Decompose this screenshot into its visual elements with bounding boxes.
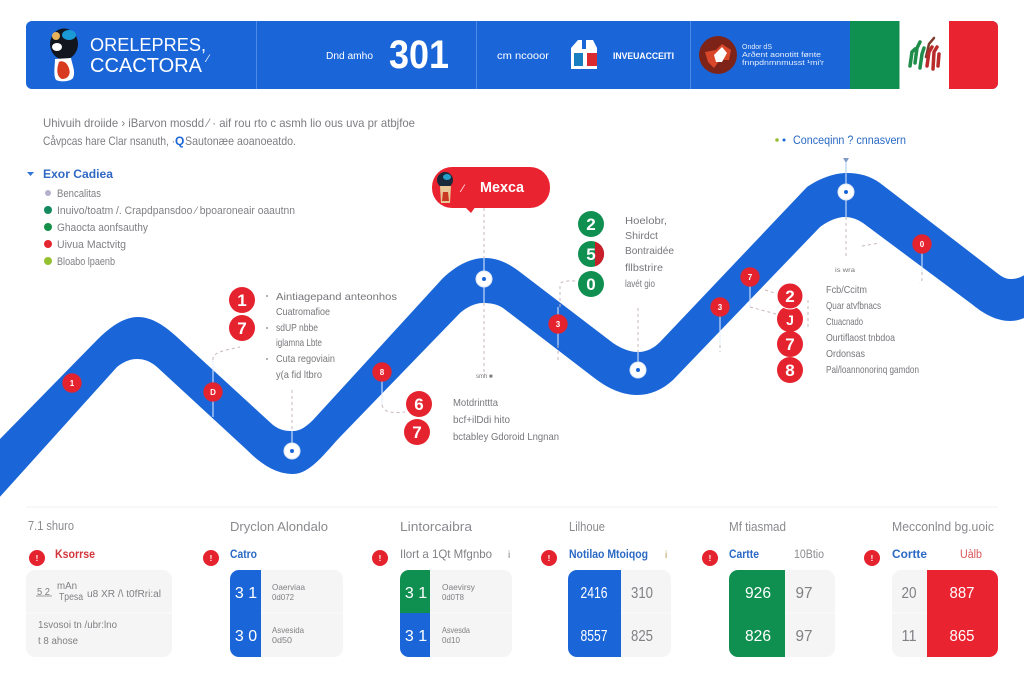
route markers: 3 — [556, 320, 561, 329]
title — [90, 35, 211, 77]
intro text: Cåvpcas hare Clar nsanuth, · — [43, 134, 175, 148]
bottom panel 5: 926 — [745, 585, 771, 602]
bottom panel 5: 97 — [796, 628, 813, 645]
callout group: left numbers: Aintiagepand anteonhos — [276, 291, 397, 303]
route markers: D — [210, 388, 216, 397]
bottom panel 3: 3 1 — [405, 585, 427, 602]
title: ⁄ — [204, 53, 211, 65]
callout group: green numbers: 2 — [586, 215, 596, 234]
callout: Mexica: Mexca — [480, 179, 525, 196]
bottom panel 2: 0d072 — [272, 592, 294, 602]
bottom panel 1 — [26, 519, 172, 657]
callout group: green numbers: 5 — [586, 245, 596, 264]
peak annotation: Conceqinn ? cnnasvern — [793, 135, 906, 147]
intro text: Q — [175, 134, 184, 148]
bottom panel 4: i — [665, 550, 667, 561]
callout group: left numbers: Cuatromafioe — [276, 306, 330, 318]
badge and note: fnnpdnmnmusst ¹mi'r — [742, 60, 825, 67]
callout group: green numbers — [578, 211, 674, 297]
bottom panel 6: 865 — [950, 628, 975, 645]
callout group: right numbers: 7 — [785, 335, 795, 354]
bottom panel 6: Cortte — [892, 547, 927, 561]
callout group: green numbers: Shirdct — [625, 230, 658, 242]
bottom panel 5: Cartte — [729, 547, 759, 561]
bottom panel 4: Notilao Mtoiqog — [569, 547, 648, 561]
legend: Bencalitas — [57, 188, 101, 200]
stat: second label with icon: cm ncooor — [497, 51, 550, 62]
bottom panel 2: 3 1 — [235, 585, 257, 602]
icon: kit box — [571, 39, 597, 69]
stat: 301 — [326, 33, 449, 77]
badge and note — [699, 36, 825, 74]
callout group: right numbers: Quar atvfbnacs — [826, 300, 881, 312]
title: ORELEPRES, — [90, 35, 206, 55]
bottom panel 3: ! — [379, 554, 381, 563]
bottom panel 5 — [702, 520, 835, 657]
bottom panel 4: 825 — [631, 628, 653, 645]
bottom panel 1: ! — [36, 554, 38, 563]
route markers: 3 — [718, 303, 723, 312]
bottom panel 4: Lilhoue — [569, 520, 605, 534]
bottom panel 3: i — [508, 550, 510, 561]
intro text — [43, 116, 415, 148]
callout group: middle numbers: 6 — [414, 395, 424, 414]
route ribbon — [0, 173, 1024, 499]
callout group: left numbers: sdUP nbbe — [276, 322, 318, 334]
bottom panel 3: Asvesda — [442, 625, 470, 635]
bottom panel 4: 2416 — [580, 585, 608, 602]
connector lines — [213, 163, 922, 446]
stat: 301: 301 — [389, 33, 449, 77]
icon: world cup trophy logo — [50, 28, 78, 81]
bottom panel 3: Lintorcaibra — [400, 520, 472, 534]
bottom panel 6: Uàlb — [960, 549, 982, 561]
stat: second label with icon: INVEUACCEITI — [613, 51, 674, 62]
callout group: green numbers: Bontraidée — [625, 245, 674, 257]
stat: second label with icon — [497, 39, 674, 69]
bottom divider — [26, 506, 998, 508]
callout group: right numbers: Pal/loannonorinq gamdon — [826, 364, 919, 376]
bottom panel 4: 8557 — [580, 628, 608, 645]
route markers: 0 — [920, 240, 925, 249]
intro text: Sautonæe aoanoeatdo. — [185, 134, 296, 148]
stat: 301: Dnd amho — [326, 51, 373, 62]
bottom panel 1: Tpesa — [59, 592, 83, 603]
callout group: right numbers: Fcb/Ccitm — [826, 284, 867, 296]
badge and note: Arðent aonotitt fønte — [742, 51, 821, 59]
bottom panel 1: u8 XR /\ t0fRri:al — [87, 589, 161, 600]
legend — [27, 167, 295, 268]
route markers: 8 — [380, 368, 385, 377]
route markers: 7 — [748, 273, 753, 282]
bottom panel 5: Mf tiasmad — [729, 520, 786, 534]
bottom panel 1: t 8 ahose — [38, 636, 78, 647]
callout group: middle numbers: Motdrinttta — [453, 397, 498, 409]
bottom panel 6: 11 — [902, 628, 917, 645]
callout group: green numbers: lavét gio — [625, 278, 655, 290]
legend: Bloabo lpaenb — [57, 256, 115, 268]
legend: Uivua Mactvitg — [57, 239, 126, 251]
icon: small trophy — [437, 172, 453, 203]
callout group: green numbers: 0 — [586, 275, 596, 294]
callout: Mexica — [432, 167, 550, 213]
legend: Exor Cadiea — [43, 167, 113, 181]
bottom panel 5: 826 — [745, 628, 771, 645]
bottom panel 1: Ksorrse — [55, 547, 95, 561]
icon: mexican emblem — [910, 38, 939, 69]
callout group: right numbers: 2 — [785, 287, 795, 306]
callout group: right numbers: J — [786, 312, 794, 328]
bottom panel 2: Dryclon Alondalo — [230, 520, 328, 534]
bottom panel 4: 310 — [631, 585, 653, 602]
callout group: green numbers: Hoelobr, — [625, 215, 667, 227]
bottom panel 1: 5 2 — [37, 587, 50, 598]
route markers — [62, 184, 932, 459]
title: CCACTORA — [90, 55, 203, 77]
bottom panel 2: Oaerviaa — [272, 582, 305, 592]
callout group: right numbers: Ctuacnado — [826, 316, 863, 328]
bottom panel 6: 20 — [902, 585, 917, 602]
bottom panel 2: 0d50 — [272, 635, 292, 645]
bottom panel 6: ! — [871, 554, 873, 563]
legend: Inuivo/toatm /. Crapdpansdoo ⁄ bpoaroneair oaautnn — [57, 205, 295, 217]
callout group: right numbers: Ordonsas — [826, 348, 865, 360]
bottom panel 3: 0d0T8 — [442, 592, 464, 602]
bottom panel 3: Ilort a 1Qt Mfgnbo — [400, 547, 492, 561]
bottom panel 1: 1svosoi tn /ubr:lno — [38, 620, 117, 631]
callout group: green numbers: fllbstrire — [625, 262, 663, 274]
bottom panel 5: 97 — [796, 585, 813, 602]
callout group: left numbers: 7 — [237, 319, 247, 338]
bottom panel 2: Asvesida — [272, 625, 304, 635]
bottom panel 1: mAn — [57, 581, 77, 592]
bottom panel 4: ! — [548, 554, 550, 563]
bottom panel 3: 3 1 — [405, 628, 427, 645]
bottom panel 1: 7.1 shuro — [28, 519, 74, 533]
callout group: middle numbers — [404, 391, 559, 445]
bottom panel 6: Mecconlnd bg.uoic — [892, 520, 994, 534]
bottom panel 6 — [864, 520, 998, 657]
callout group: right numbers: Ourtiflaost tnbdoa — [826, 332, 895, 344]
bottom panel 3: Oaevirsy — [442, 582, 476, 592]
peak annotation: is wra — [835, 267, 855, 274]
legend: Ghaocta aonfsauthy — [57, 222, 148, 234]
bottom panel 2: ! — [210, 554, 212, 563]
route markers: 1 — [70, 379, 75, 388]
badge and note: Ondor dS — [742, 44, 772, 51]
bottom panel 2 — [203, 520, 343, 657]
callout group: right numbers: 8 — [785, 361, 795, 380]
callout group: left numbers: iglamna Lbte — [276, 337, 322, 349]
peak annotation — [775, 135, 906, 274]
bottom panel 4 — [541, 520, 671, 657]
callout group: middle numbers: bctabley Gdoroid Lngnan — [453, 431, 559, 443]
bottom panel 3: 0d10 — [442, 635, 460, 645]
callout: Mexica: ⁄ — [459, 183, 466, 195]
bottom panel 2: 3 0 — [235, 628, 257, 645]
bottom panel 6: 887 — [950, 585, 975, 602]
caption under peak: smh ■ — [476, 374, 493, 380]
intro text: Uhivuih droiide › iBarvon mosdd ⁄ · aif rou rto c asmh lio ous uva pr atbjfoe — [43, 116, 415, 130]
callout group: left numbers — [229, 287, 397, 381]
callout group: middle numbers: bcf+ilDdi hito — [453, 414, 510, 426]
callout group: right numbers — [777, 283, 919, 383]
bottom panel 5: ! — [709, 554, 711, 563]
callout group: left numbers: y(a fid ltbro — [276, 369, 322, 381]
callout group: left numbers: 1 — [237, 291, 247, 310]
bottom panel 2: Catro — [230, 547, 257, 561]
callout group: middle numbers: 7 — [412, 423, 422, 442]
bottom panel 3 — [372, 520, 512, 657]
callout group: left numbers: Cuta regoviain — [276, 353, 335, 365]
bottom panel 5: 10Btio — [794, 549, 824, 561]
